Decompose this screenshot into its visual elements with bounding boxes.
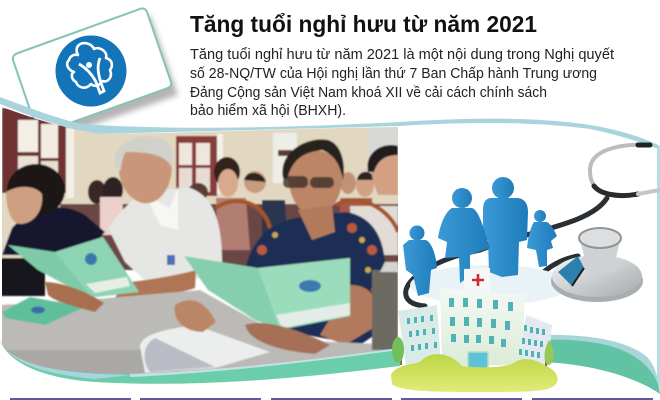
- title: Tăng tuổi nghỉ hưu từ năm 2021: [190, 11, 537, 37]
- text block: introduction: Đảng Cộng sản Việt Nam khoá XII về cải cách chính sách: [190, 84, 547, 101]
- woman on left: [0, 164, 105, 296]
- green hill: [391, 354, 558, 392]
- text block: introduction: Tăng tuổi nghỉ hưu từ năm 2021 là một nội dung trong Nghị quyết: [190, 46, 615, 63]
- green book on table: [2, 297, 85, 325]
- icon: mother figure: [438, 188, 490, 283]
- woman with glasses and floral shirt: [245, 139, 385, 345]
- man's hand: [45, 282, 104, 312]
- icon: right child figure: [527, 210, 557, 267]
- photo: meeting participants reading insurance books: [0, 100, 400, 380]
- icon: father figure: [483, 177, 528, 277]
- green insurance book held by man: [8, 237, 139, 297]
- bottom bars: [10, 398, 653, 400]
- panel: ID card with logo: [13, 8, 178, 142]
- papers: [140, 325, 270, 373]
- stethoscope chest piece: [551, 228, 643, 302]
- shadow under family: [410, 265, 570, 305]
- trees: [392, 337, 554, 372]
- hospital buildings: [398, 268, 552, 369]
- background audience: [60, 145, 400, 270]
- curved frame band: [0, 97, 660, 394]
- room background: [0, 100, 400, 260]
- text block: introduction: số 28-NQ/TW của Hội nghị lần thứ 7 Ban Chấp hành Trung ương: [190, 65, 597, 82]
- hands holding book: [175, 300, 330, 354]
- man in white shirt: [108, 136, 222, 305]
- text block: introduction: bảo hiểm xã hội (BHXH).: [190, 102, 346, 119]
- stethoscope tubing: [406, 145, 660, 306]
- text block: introduction: [190, 46, 615, 119]
- green insurance book held by woman: [184, 256, 350, 330]
- illustration: family and hospital: [391, 145, 660, 392]
- hospital windows: [407, 298, 545, 358]
- table: [0, 262, 400, 380]
- icon: social insurance logo: [56, 36, 126, 106]
- icon: left child figure: [403, 226, 437, 296]
